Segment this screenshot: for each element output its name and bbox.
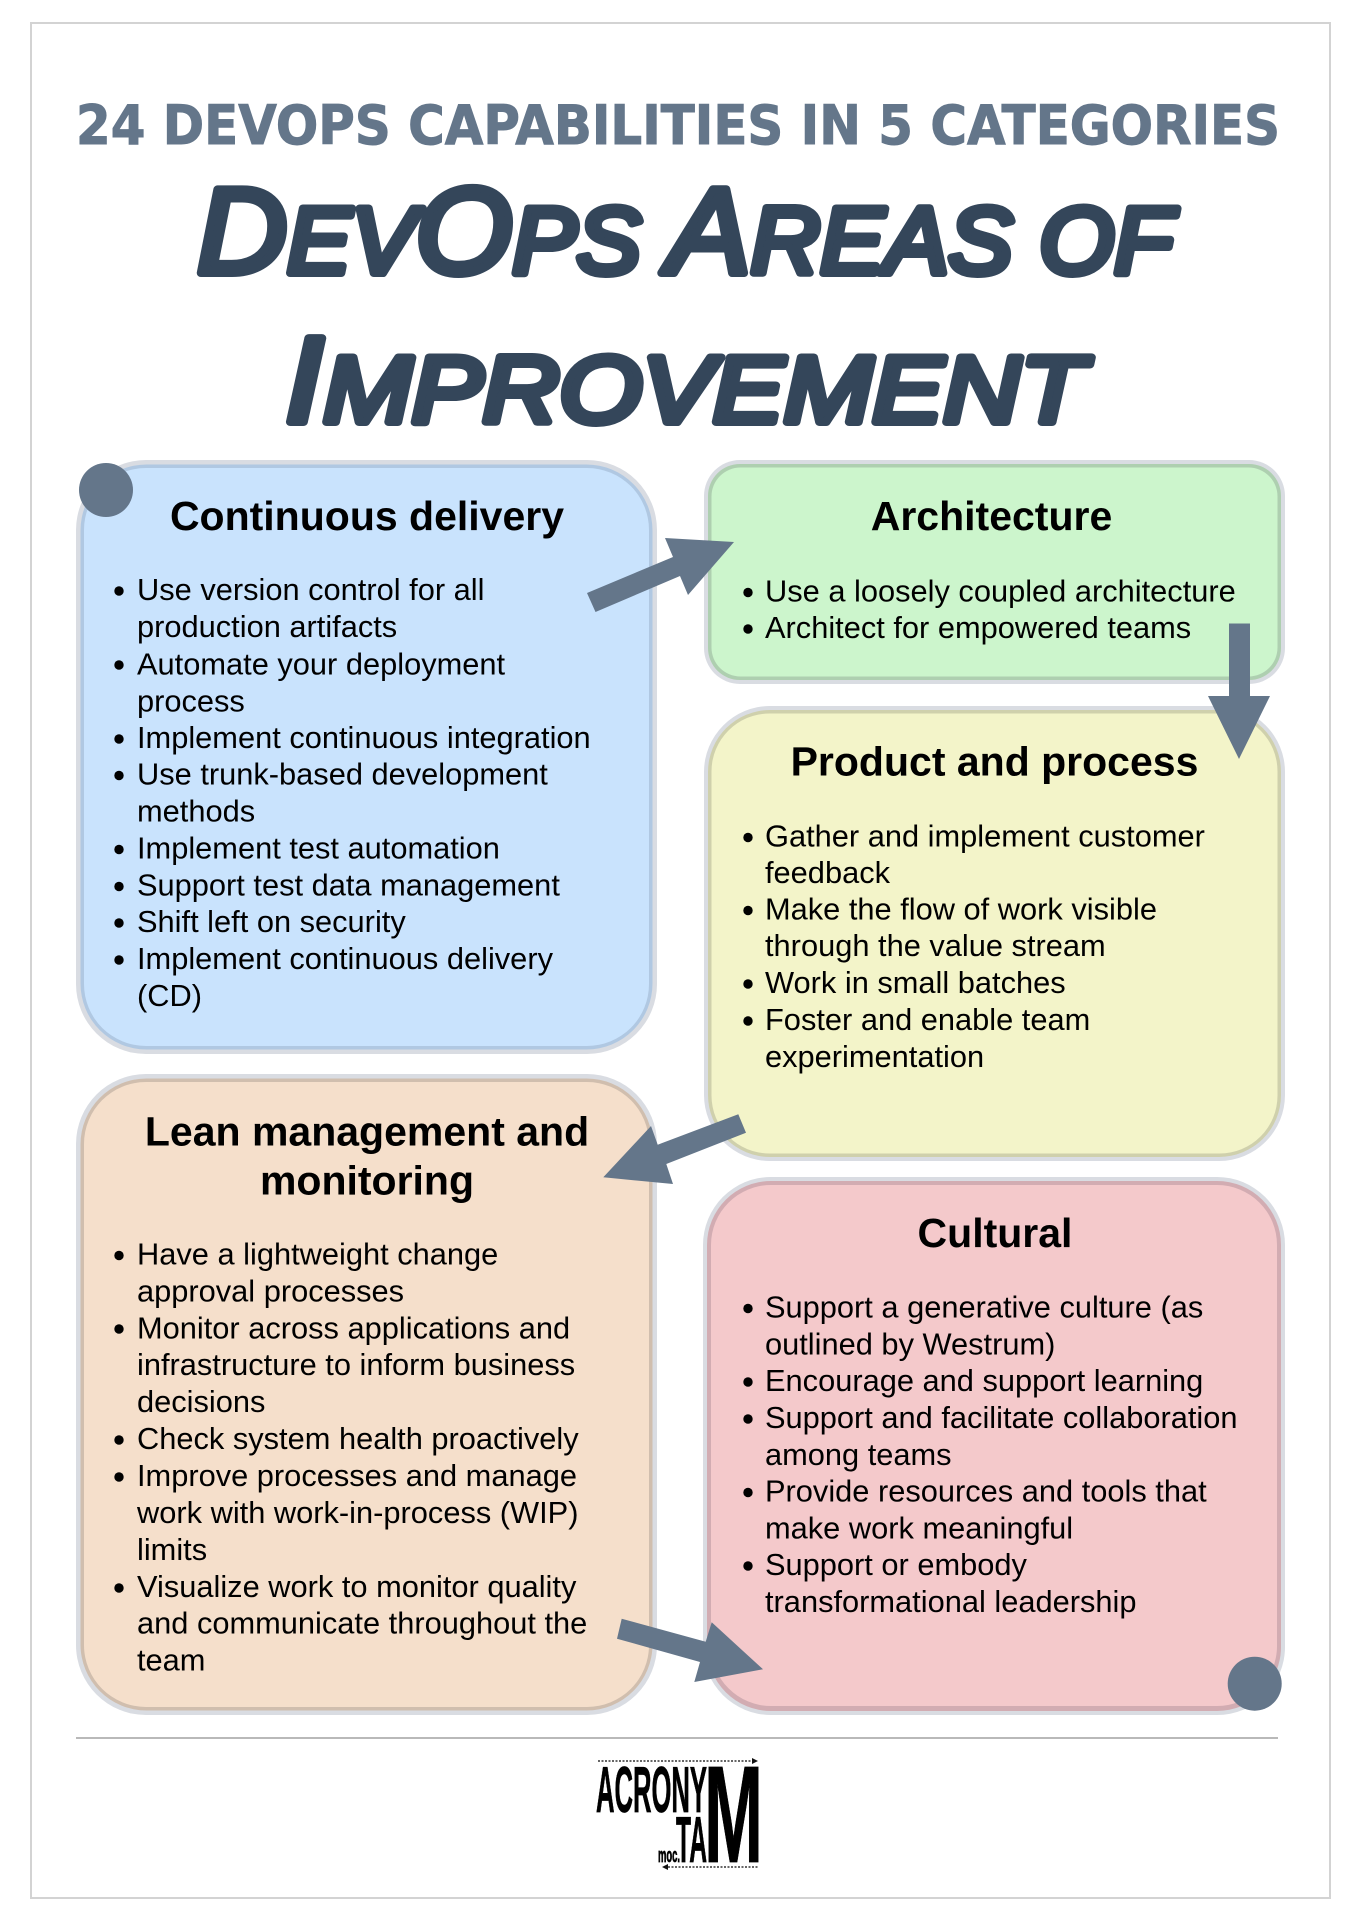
list: continuous delivery items: Use trunk-based development — [137, 756, 548, 792]
list: continuous delivery items: Implement test automation — [137, 830, 500, 866]
panel: lean management and monitoring — [76, 1074, 657, 1715]
list: lean management items: infrastructure to inform business — [137, 1347, 575, 1382]
list: cultural items: make work meaningful — [765, 1510, 1073, 1546]
list: cultural items: Support or embody — [765, 1547, 1028, 1582]
title: IMPROVEMENT — [285, 312, 1091, 448]
arrow: continuous delivery to architecture — [587, 538, 734, 612]
list: cultural items — [743, 1290, 1238, 1619]
list: lean management items: Check system health proactively — [137, 1421, 579, 1456]
list: continuous delivery items: (CD) — [137, 978, 202, 1013]
list: continuous delivery items: Implement continuous integration — [137, 720, 591, 755]
list: cultural items: Encourage and support learning — [765, 1363, 1203, 1398]
list: product and process items: through the value stream — [765, 928, 1106, 963]
list: cultural items: outlined by Westrum) — [765, 1326, 1055, 1362]
list: cultural items: Provide resources and tools that — [765, 1474, 1207, 1508]
list: cultural items: Support a generative culture (as — [765, 1290, 1203, 1324]
list: lean management items: decisions — [137, 1384, 265, 1419]
subtitle: 24 DEVOPS CAPABILITIES IN 5 CATEGORIES — [76, 94, 1280, 157]
list: product and process items: Foster and enable team — [765, 1002, 1090, 1037]
logo: TA — [676, 1803, 707, 1876]
heading: continuous delivery: Continuous delivery — [170, 493, 564, 539]
list: lean management items — [114, 1236, 587, 1678]
arrow: architecture to product and process — [1208, 624, 1270, 759]
logo — [596, 1738, 763, 1892]
arrow: product and process to lean management — [603, 1114, 746, 1184]
list: lean management items: approval processes — [137, 1274, 404, 1308]
list: continuous delivery items: Support test data management — [137, 868, 560, 902]
list: product and process items: Work in small batches — [765, 965, 1066, 1000]
heading: architecture: Architecture — [871, 493, 1112, 539]
list: lean management items: team — [137, 1642, 205, 1678]
list: cultural items: among teams — [765, 1437, 952, 1472]
list: lean management items: Visualize work to monitor quality — [137, 1569, 577, 1604]
list: lean management items: limits — [137, 1532, 207, 1567]
list: lean management items: Have a lightweight change — [137, 1236, 498, 1272]
list: product and process items: experimentation — [765, 1039, 984, 1074]
title: DEVOPS AREAS OF — [197, 163, 1178, 299]
heading: product and process: Product and process — [791, 738, 1198, 784]
list: lean management items: Monitor across applications and — [137, 1310, 570, 1346]
title — [197, 163, 1178, 448]
list: architecture items — [743, 574, 1236, 645]
icon: start circle — [79, 463, 133, 517]
list: cultural items: Support and facilitate collaboration — [765, 1400, 1238, 1435]
list: continuous delivery items: production artifacts — [137, 609, 397, 644]
panel: architecture — [704, 460, 1285, 684]
heading: cultural: Cultural — [918, 1210, 1072, 1256]
list: lean management items: and communicate throughout the — [137, 1606, 587, 1640]
list: lean management items: work with work-in-process (WIP) — [136, 1495, 578, 1530]
list: architecture items: Architect for empowered teams — [765, 610, 1191, 645]
panel: continuous delivery — [76, 460, 657, 1054]
list: product and process items — [743, 818, 1205, 1074]
logo: moc. — [658, 1845, 680, 1867]
list: product and process items: feedback — [765, 855, 891, 890]
panel: product and process — [704, 706, 1285, 1161]
list: continuous delivery items: methods — [137, 794, 255, 828]
list: cultural items: transformational leadership — [765, 1584, 1136, 1619]
list: product and process items: Make the flow of work visible — [765, 892, 1157, 926]
list: architecture items: Use a loosely coupled architecture — [765, 574, 1236, 608]
arrow: lean management to cultural — [617, 1619, 763, 1682]
heading: lean management and monitoring: Lean management and — [145, 1108, 589, 1154]
divider — [76, 1737, 1278, 1739]
list: product and process items: Gather and implement customer — [765, 818, 1205, 854]
logo: ACRONY — [596, 1753, 707, 1826]
icon: end circle — [1228, 1657, 1282, 1711]
list: lean management items: Improve processes and manage — [137, 1458, 577, 1493]
list: continuous delivery items: Implement continuous delivery — [137, 941, 554, 976]
list: continuous delivery items: Shift left on security — [137, 904, 406, 939]
list: continuous delivery items: process — [137, 684, 245, 718]
panel: lean management and monitoring: monitoring — [260, 1158, 474, 1204]
logo: M — [704, 1738, 763, 1892]
list: continuous delivery items: Automate your deployment — [137, 646, 506, 682]
list: continuous delivery items: Use version control for all — [137, 572, 484, 607]
panel: cultural — [703, 1177, 1285, 1715]
list: continuous delivery items — [114, 572, 591, 1013]
